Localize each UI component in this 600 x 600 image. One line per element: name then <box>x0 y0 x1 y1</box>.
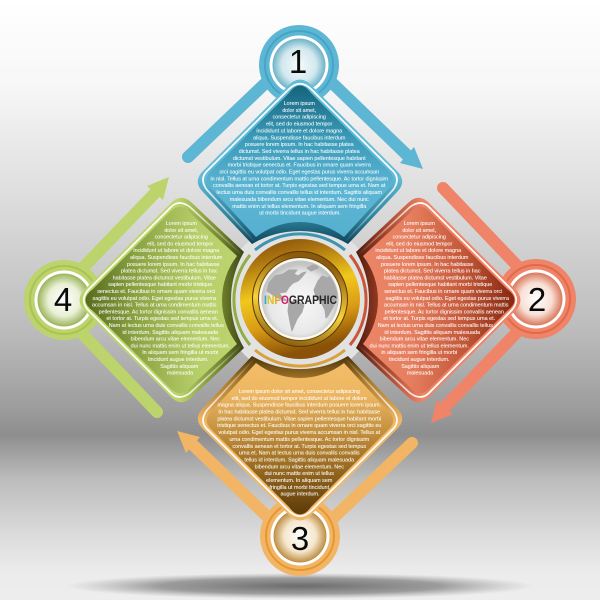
text block: green panel: accumsan in nisl. Tellus at urna condimentum mattis <box>92 303 217 309</box>
arrows: step 4 <box>74 177 169 412</box>
text block: red panel: posuere lorem ipsum. In hac habitasse <box>381 262 474 268</box>
text block: green panel: bibendum arcu vitae elementum. Nec <box>131 337 220 343</box>
text block: green panel: dolor sit amet, <box>164 228 199 234</box>
text block: green panel: incididunt ut labore et dolore magna <box>133 248 219 254</box>
title: INFOGRAPHIC: INFOGRAPHIC <box>264 293 337 307</box>
text block: orange panel: elit, sed do eiusmod tempor incididunt ut labore et dolore <box>232 396 367 402</box>
text block: blue panel: dolor sit amet, <box>282 108 317 114</box>
text block: green panel: Sagittis aliquam <box>160 364 199 370</box>
text block: blue panel: consectetur adipiscing <box>273 115 326 121</box>
text block: orange panel: urna condimentum mattis pellentesque. Ac tortor dignissim <box>229 437 370 443</box>
center halo <box>222 222 378 378</box>
text block: green panel: sapien pellentesque habitant morbi tristique <box>108 282 212 288</box>
text block: green panel: platea dictumst. Sed viverra tellus in hac <box>121 269 218 275</box>
text block: red panel: elit, sed do eiusmod tempor <box>386 241 453 247</box>
text block: green panel: et tortor at. Turpis egestas sed tempus urna et. <box>106 316 218 322</box>
text block: red panel: tincidunt augue interdum. <box>389 357 450 363</box>
gold ring medallion <box>240 239 360 359</box>
badge circle 3 <box>260 496 340 576</box>
text block: orange panel: fringilla ut morbi tincidunt <box>269 485 330 491</box>
text block: red panel: dolor sit amet, <box>402 228 437 234</box>
number 1: 1 <box>289 43 307 80</box>
panel: blue diamond <box>198 80 402 250</box>
text block: green panel: elit, sed do eiusmod tempor <box>147 241 214 247</box>
text block: blue panel: incididunt ut labore et dolore magna <box>256 128 342 134</box>
text block: green panel: malesuada <box>167 371 193 377</box>
text block: blue panel: aliqua. Suspendisse faucibus interdum <box>253 135 346 141</box>
text block: orange panel: volutpat odio. Eget egestas purus viverra accumsan in nisl. Tellus at <box>218 430 381 436</box>
text block: orange panel: dui nunc mattis enim ut tellus <box>264 471 334 477</box>
text block: orange panel: magna aliqua. Suspendisse faucibus interdum posuere lorem ipsum. <box>217 403 381 409</box>
text block: red panel: Nam at lectus urna duis convallis convallis tellus <box>378 323 493 329</box>
text block: red panel: platea dictumst. Sed viverra tellus in hac <box>384 269 481 275</box>
badge circle 1 <box>259 25 339 105</box>
text block: green panel: tincidunt augue interdum. <box>148 357 209 363</box>
text block: red panel: in aliquam sem fringilla ut morbi <box>381 350 457 356</box>
text block: red panel: Sagittis aliquam <box>401 364 440 370</box>
text block: red panel: consectetur adipiscing <box>393 235 446 241</box>
text block: red panel: pellentesque. Ac tortor dignissim convallis aenean <box>385 309 504 315</box>
text block: red panel: bibendum arcu vitae elementum. Nec <box>380 337 469 343</box>
text block: red panel: Lorem ipsum <box>404 221 435 227</box>
text block: blue panel: ut morbi tincidunt augue interdum. <box>259 211 341 217</box>
text block: orange panel: augue interdum. <box>281 492 319 498</box>
text block: orange panel: bibendum arcu vitae elementum. Nec <box>255 464 344 470</box>
text block: blue panel: posuere lorem ipsum. In hac habitasse platea <box>245 142 354 148</box>
text block: blue panel: malesuada bibendum arcu vitae elementum. Nec dui nunc <box>230 197 369 203</box>
text block: green panel: sagittis eu volutpat odio. Eget egestas purus viverra <box>93 296 216 302</box>
badge circle 4 <box>24 260 104 340</box>
text block: green panel: aliqua. Suspendisse faucibus interdum <box>130 255 223 261</box>
text block: green panel: dui nunc mattis enim ut tellus elementum. <box>131 343 230 349</box>
text block: orange panel: In hac habitasse platea dictumst. Sed viverra tellus in hac habitasse <box>218 410 380 416</box>
text block: green panel: consectetur adipiscing <box>155 235 208 241</box>
text block: green panel: id interdum. Sagittis aliquam malesuada <box>122 330 218 336</box>
panel: red diamond <box>350 198 520 402</box>
text block: blue panel: lectus urna duis convallis convallis tellus id interdum. Sagittis aliquam <box>217 190 382 196</box>
text block: red panel: dui nunc mattis enim ut tellus elementum. <box>370 343 469 349</box>
text block: green panel: pellentesque. Ac tortor dignissim convallis aenean <box>99 309 218 315</box>
text block: blue panel: orci sagittis eu volutpat odio. Eget egestas purus viverra accumsan <box>219 170 379 176</box>
text block: blue panel: morbi tristique senectus et. Faucibus in ornare quam viverra <box>228 163 371 169</box>
text block: red panel: sagittis eu volutpat odio. Eget egestas purus viverra <box>386 296 509 302</box>
number 2: 2 <box>528 281 546 318</box>
text block: red panel: incididunt ut labore et dolore magna <box>375 248 461 254</box>
text block: orange panel: convallis aenean et tortor at. Turpis egestas sed tempus <box>232 444 366 450</box>
text block: green panel: Nam at lectus urna duis convallis convallis tellus <box>109 323 224 329</box>
text block: red panel: aliqua. Suspendisse faucibus interdum <box>376 255 469 261</box>
text block: orange panel: tristique senectus et. Faucibus in ornare quam viverra orci sagittis eu <box>217 423 381 429</box>
text block: green panel: Lorem ipsum <box>166 221 197 227</box>
text block: blue panel: mattis enim ut tellus elementum. In aliquam sem fringilla <box>232 204 366 210</box>
text block: orange panel: elementum. In aliquam sem <box>266 478 333 484</box>
number 4: 4 <box>54 281 72 318</box>
text block: blue panel: dictumst vestibulum. Vitae sapien pellentesque habitant <box>233 156 366 162</box>
text block: red panel: id interdum. Sagittis aliquam malesuada <box>384 330 480 336</box>
number 3: 3 <box>291 520 309 557</box>
text block: blue panel: dictumst. Sed viverra tellus in hac habitasse platea <box>239 149 360 155</box>
text block: red panel: senectus et. Faucibus in ornare quam viverra orci <box>384 289 502 295</box>
text block: red panel: malesuada <box>407 371 433 377</box>
text block: orange panel: Lorem ipsum dolor sit amet, consectetur adipiscing <box>239 389 360 395</box>
text block: blue panel: convallis aenean et tortor at. Turpis egestas sed tempus urna et. Nam at <box>213 183 386 189</box>
text block: blue panel: Lorem ipsum <box>284 101 315 107</box>
text block: orange panel: tellus id interdum. Sagittis aliquam malesuada <box>244 458 354 464</box>
text block: blue panel: in nisl. Tellus at urna condimentum mattis pellentesque. Ac tortor dignissim <box>210 176 389 182</box>
arrows: step 3 <box>177 431 412 526</box>
badge circle 2 <box>496 259 576 339</box>
text block: red panel: accumsan in nisl. Tellus at urna condimentum mattis <box>384 303 509 309</box>
text block: blue panel: elit, sed do eiusmod tempor <box>266 122 333 128</box>
panel: orange diamond <box>198 350 402 520</box>
text block: green panel: posuere lorem ipsum. In hac habitasse <box>127 262 220 268</box>
text block: orange panel: urna et. Nam at lectus urna duis convallis convallis <box>239 451 360 457</box>
text block: green panel: senectus et. Faucibus in ornare quam viverra orci <box>97 289 215 295</box>
text block: red panel: sapien pellentesque habitant morbi tristique <box>388 282 492 288</box>
arrows: step 1 <box>188 74 423 169</box>
globe <box>262 260 338 338</box>
text block: orange panel: platea dictumst vestibulum. Vitae sapien pellentesque habitant morbi <box>217 416 381 422</box>
text block: green panel: In aliquam sem fringilla ut morbi <box>142 350 218 356</box>
arrows: step 2 <box>431 188 526 423</box>
text block: red panel: habitasse platea dictumst vestibulum. Vitae <box>384 275 487 281</box>
text block: red panel: et tortor at. Turpis egestas sed tempus urna et. <box>383 316 495 322</box>
text block: green panel: habitasse platea dictumst vestibulum. Vitae <box>113 275 216 281</box>
ground shadow <box>65 573 535 599</box>
panel: green diamond <box>80 198 250 402</box>
